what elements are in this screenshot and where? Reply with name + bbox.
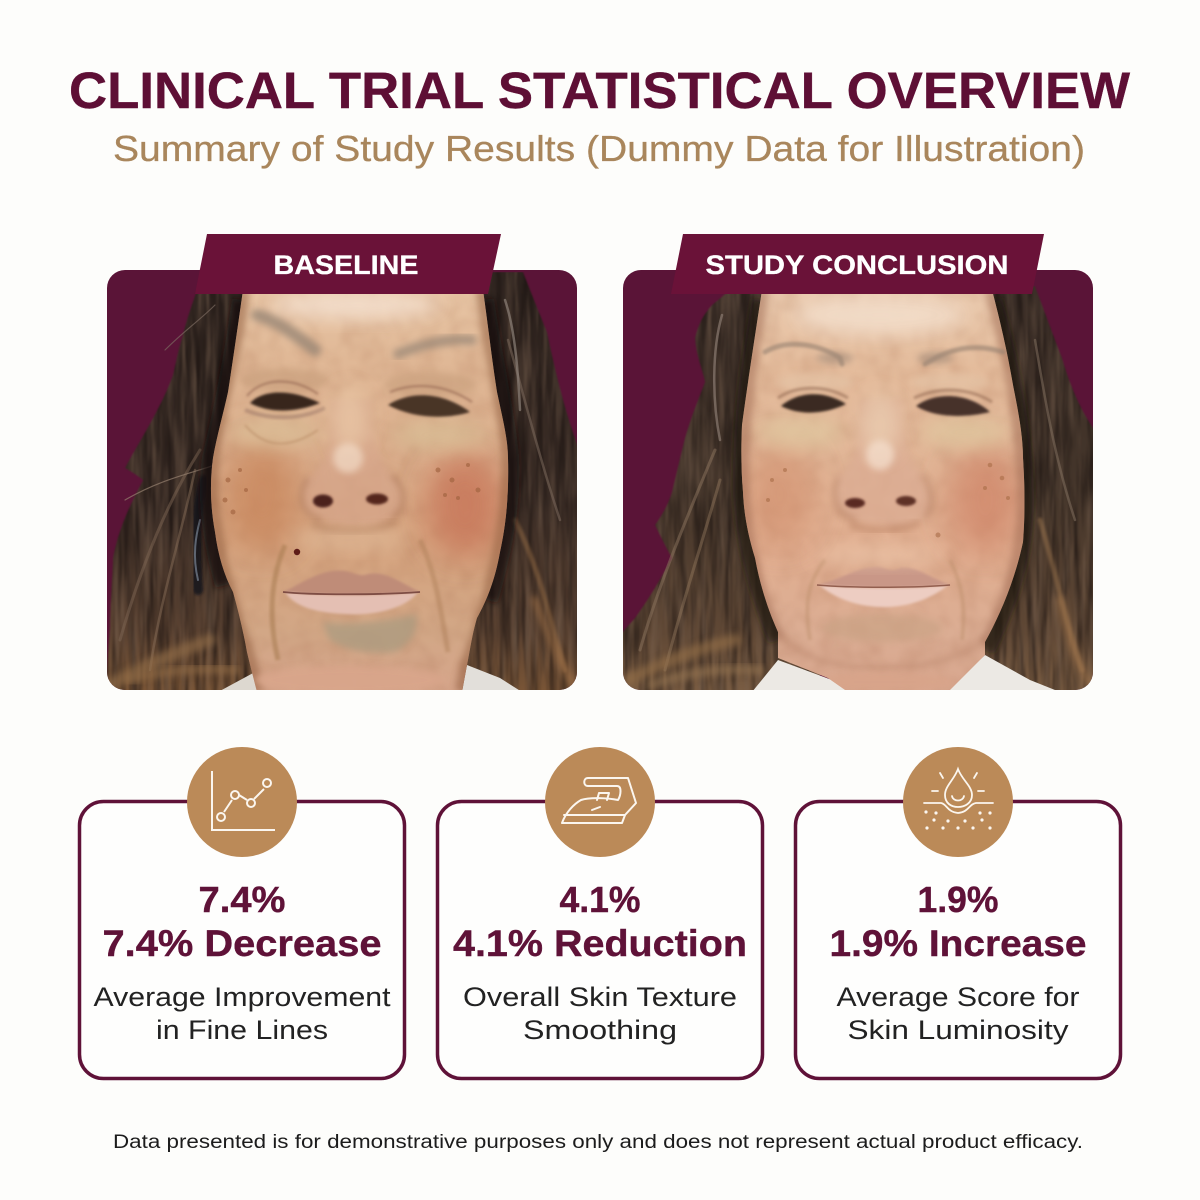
brows <box>257 315 315 350</box>
dark hair beside face <box>211 300 508 600</box>
card outline <box>796 802 1120 1078</box>
panel: luminosity stat <box>796 747 1120 1078</box>
hair highlights <box>628 315 1090 685</box>
face edge shade <box>743 290 1024 645</box>
icon: line chart <box>187 747 297 857</box>
stat: 7.4%: 7.4% <box>198 879 286 920</box>
ribbon: baseline <box>195 234 501 294</box>
description: texture: Overall Skin Texture <box>463 982 737 1012</box>
hair highlights <box>110 300 575 685</box>
infographic canvas <box>70 72 1130 1152</box>
description: fine lines <box>94 982 391 1045</box>
face edge shade <box>212 290 508 692</box>
panel: fine lines stat <box>80 747 404 1078</box>
stat label: 1.9% Increase: 1.9% Increase <box>830 923 1086 964</box>
footer disclaimer: Data presented is for demonstrative purposes only and does not represent actual product efficacy. <box>113 1132 1083 1153</box>
hair <box>620 290 820 695</box>
hair <box>107 294 252 690</box>
freckles <box>766 463 1010 538</box>
mole <box>294 549 300 555</box>
shirt collar <box>754 660 845 690</box>
freckles <box>222 463 480 514</box>
forehead highlight <box>795 295 965 335</box>
ribbon: study conclusion <box>671 234 1044 294</box>
chin shadow <box>322 614 417 653</box>
photo: baseline portrait <box>105 270 580 695</box>
description: luminosity: Average Score for <box>836 982 1080 1012</box>
nose <box>304 484 397 522</box>
chin shade <box>822 614 942 642</box>
icon: iron <box>545 747 655 857</box>
title: CLINICAL TRIAL STATISTICAL OVERVIEW <box>69 62 1131 119</box>
face and neck <box>735 285 1035 695</box>
eyes <box>781 394 846 413</box>
description: fine lines: Average Improvement <box>94 982 391 1012</box>
photo: study conclusion portrait <box>620 270 1096 695</box>
stat label: 7.4% Decrease: 7.4% Decrease <box>102 923 382 964</box>
ribbon: study conclusion: STUDY CONCLUSION <box>706 250 1008 280</box>
stat: 1.9%: 1.9% <box>918 879 998 920</box>
eye bag lines <box>245 425 318 444</box>
eyes <box>250 392 320 411</box>
description: texture: Smoothing <box>523 1015 677 1045</box>
panel: baseline photo <box>105 234 580 695</box>
description: fine lines: in Fine Lines <box>156 1015 328 1045</box>
forehead highlight <box>270 291 440 319</box>
card outline <box>438 802 762 1078</box>
jaw shade <box>788 640 980 670</box>
shirt collar <box>462 665 519 690</box>
panel: study conclusion photo <box>620 234 1096 695</box>
description: texture <box>463 982 737 1045</box>
cheek colour <box>226 440 298 550</box>
stat: 4.1%: 4.1% <box>560 879 640 920</box>
nostrils <box>313 494 333 508</box>
description: luminosity <box>836 982 1080 1045</box>
nasolabial folds <box>807 560 825 640</box>
lips <box>286 570 418 594</box>
panel: texture stat <box>438 747 762 1078</box>
dark hair beside face <box>743 300 1024 650</box>
nasolabial folds <box>272 545 285 660</box>
nose <box>847 503 925 516</box>
nostrils <box>845 498 865 508</box>
eye socket shade <box>795 374 847 388</box>
face <box>205 285 515 695</box>
eye socket shade <box>245 368 326 391</box>
icon: water drop on skin <box>903 747 1013 857</box>
brows <box>765 344 842 364</box>
description: luminosity: Skin Luminosity <box>848 1015 1069 1045</box>
lips <box>817 567 950 588</box>
stat label: 4.1% Reduction: 4.1% Reduction <box>453 923 747 964</box>
card outline <box>80 802 404 1078</box>
subtitle: Summary of Study Results (Dummy Data for Illustration) <box>113 128 1085 169</box>
under-eye areas <box>756 417 844 447</box>
cheek colour <box>746 445 814 545</box>
under-eye areas <box>229 417 321 447</box>
ribbon: baseline: BASELINE <box>274 250 418 280</box>
